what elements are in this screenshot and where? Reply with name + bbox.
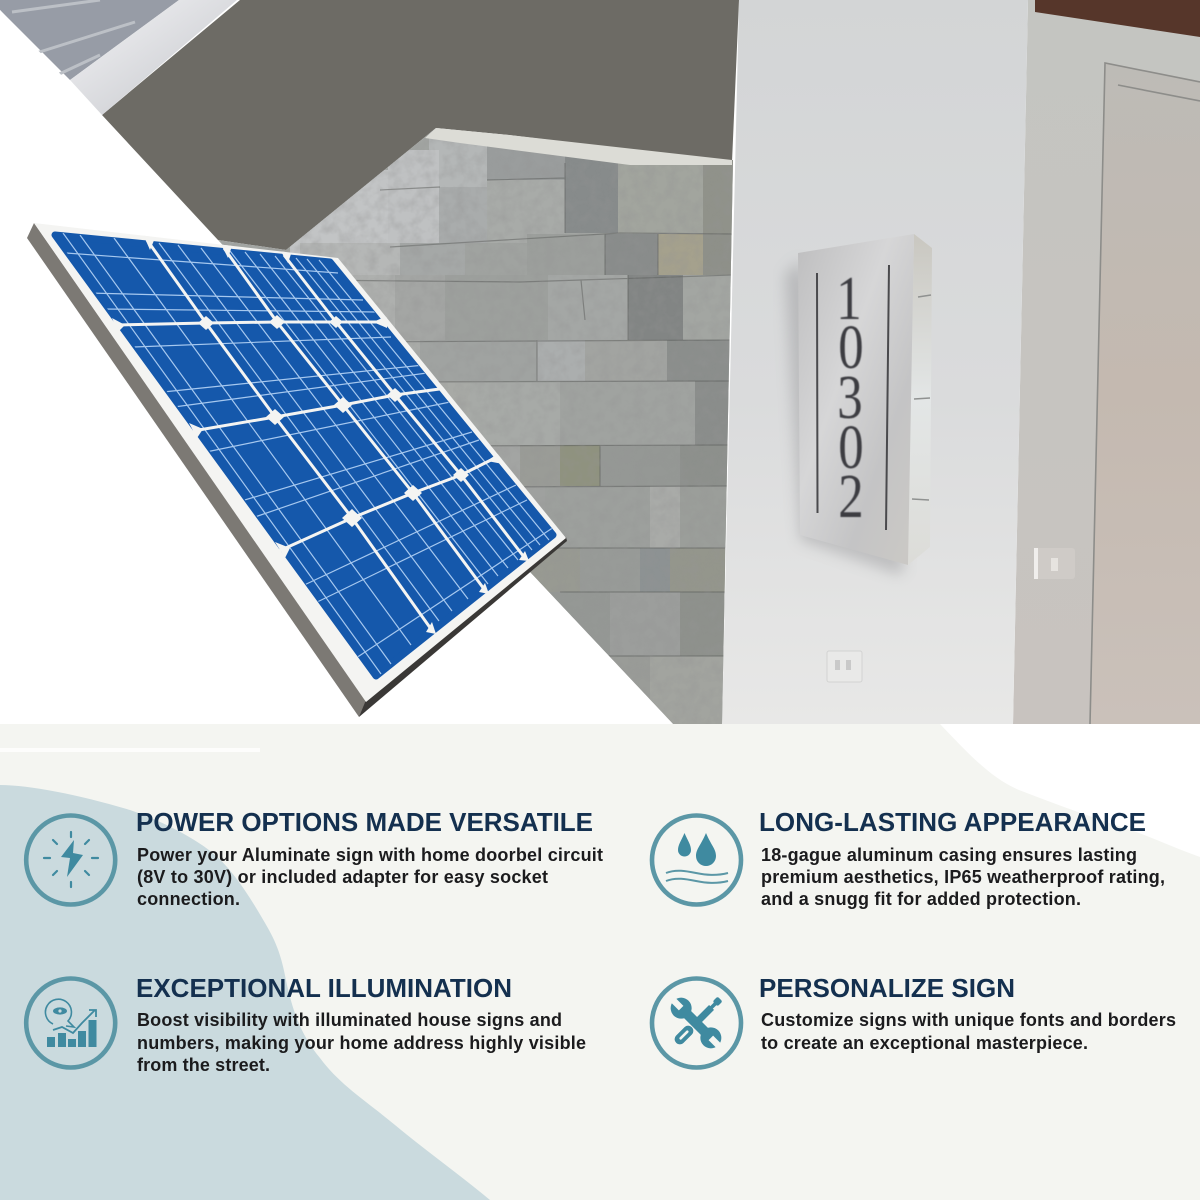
dark ceiling <box>102 0 739 250</box>
icon: water drops <box>652 816 741 904</box>
cell junction diamonds and corner notches <box>112 234 529 634</box>
description <box>761 845 1165 909</box>
sign digits: 3 <box>837 363 863 432</box>
sign digits: 0 <box>838 313 864 382</box>
feature: power options <box>26 807 603 909</box>
description <box>137 845 603 909</box>
wood soffit <box>1035 0 1200 37</box>
lower info panel background <box>0 724 1200 1200</box>
light switch <box>1034 548 1075 579</box>
description: and a snugg fit for added protection. <box>761 889 1081 909</box>
faint white band <box>0 748 260 752</box>
house number sign <box>785 234 932 575</box>
wall outlet <box>827 651 862 682</box>
sign side <box>908 234 932 565</box>
heading: POWER OPTIONS MADE VERSATILE <box>136 807 593 837</box>
icon: lightning bolt <box>26 816 115 904</box>
description <box>761 1010 1176 1053</box>
description: from the street. <box>137 1055 270 1075</box>
panel blue cells <box>55 235 553 676</box>
feature: personalize sign <box>652 973 1176 1068</box>
description: Customize signs with unique fonts and borders <box>761 1010 1176 1030</box>
description: (8V to 30V) or included adapter for easy socket <box>137 867 548 887</box>
sign digits: 2 <box>838 462 864 531</box>
white stair band <box>70 0 237 115</box>
heading: LONG-LASTING APPEARANCE <box>759 807 1146 837</box>
description: premium aesthetics, IP65 weatherproof rating, <box>761 867 1165 887</box>
feature: exceptional illumination <box>26 973 586 1075</box>
description: numbers, making your home address highly visible <box>137 1033 586 1053</box>
left wall <box>722 0 1028 724</box>
description <box>137 1010 586 1075</box>
sign slots <box>817 265 889 530</box>
description: connection. <box>137 889 240 909</box>
panel side edge <box>27 223 368 717</box>
panel white frame <box>34 223 566 702</box>
stone wall <box>200 125 740 730</box>
icon: wrench and screwdriver <box>652 978 741 1068</box>
description: 18-gague aluminum casing ensures lasting <box>761 845 1137 865</box>
description: to create an exceptional masterpiece. <box>761 1033 1088 1053</box>
white ledge over stone <box>425 128 732 165</box>
white diagonal area <box>0 10 673 724</box>
white corner shape <box>940 724 1200 857</box>
sign digits <box>836 264 864 531</box>
sign digits: 1 <box>836 264 862 333</box>
blue-grey blob <box>0 785 490 1200</box>
icon: eye and growth chart <box>26 978 115 1068</box>
solar panel <box>27 223 567 717</box>
sign front face <box>798 234 914 565</box>
description: Power your Aluminate sign with home doorbel circuit <box>137 845 603 865</box>
thin grid lines <box>63 233 554 674</box>
panel bottom dark edge <box>359 537 567 717</box>
sign shadow <box>785 260 905 575</box>
thick white cell dividers <box>116 240 524 629</box>
photo background: building exterior <box>0 0 1200 730</box>
door <box>1090 63 1200 724</box>
feature: long-lasting appearance <box>652 807 1165 909</box>
sign digits: 0 <box>838 413 864 482</box>
right wall <box>1013 0 1200 724</box>
heading: PERSONALIZE SIGN <box>759 973 1015 1003</box>
brick wall upper left <box>0 0 179 80</box>
description: Boost visibility with illuminated house signs and <box>137 1010 562 1030</box>
heading: EXCEPTIONAL ILLUMINATION <box>136 973 512 1003</box>
